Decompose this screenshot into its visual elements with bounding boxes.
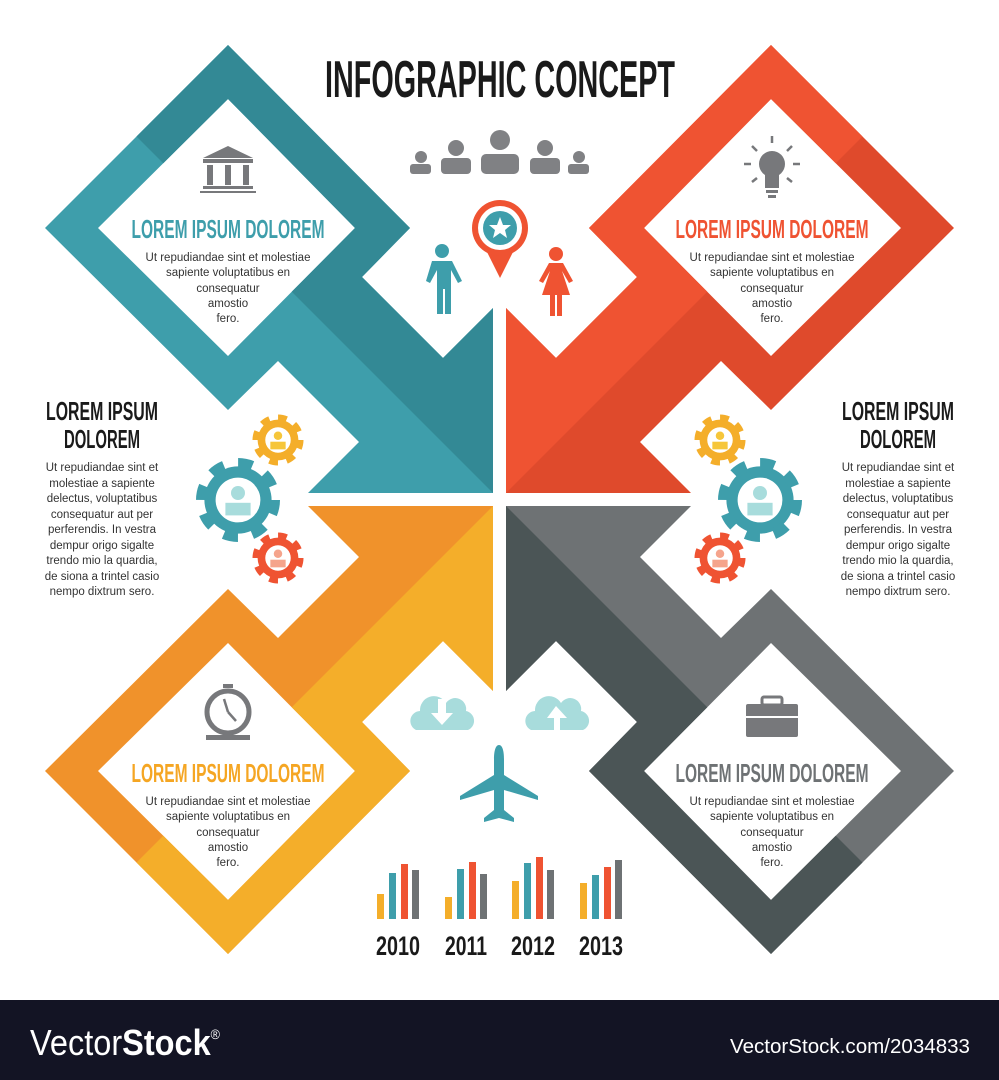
text: teal diamond: fero. xyxy=(216,313,240,325)
text: teal diamond: sapiente voluptatibus en xyxy=(166,267,290,279)
icon: bank xyxy=(200,146,256,193)
text: red diamond: sapiente voluptatibus en xyxy=(710,267,834,279)
text: gray diamond: Ut repudiandae sint et molestiae xyxy=(690,796,854,808)
text: years: 2013 xyxy=(579,931,623,961)
text: left side block: trendo mio la quardia, xyxy=(46,555,158,567)
text: teal diamond: amostio xyxy=(208,298,248,310)
text: red diamond: fero. xyxy=(760,313,784,325)
text: teal diamond: consequatur xyxy=(196,283,260,295)
text: left side block: dempur origo sigalte xyxy=(50,540,154,552)
text: left side block: nempo dixtrum sero. xyxy=(50,586,154,598)
text: right side block: delectus, voluptatibus xyxy=(843,493,954,505)
text: orange diamond: LOREM IPSUM DOLOREM xyxy=(132,758,324,788)
text: left side block: LOREM IPSUM xyxy=(46,396,158,426)
footer bar: VectorStock xyxy=(30,1022,220,1063)
footer bar: VectorStock.com/2034833 xyxy=(730,1036,970,1058)
text: left side block: perferendis. In vestra xyxy=(48,524,157,536)
icon: cloud upload xyxy=(525,696,589,731)
text: right side block: DOLOREM xyxy=(860,424,936,454)
panel: orange arrow xyxy=(45,506,493,954)
text: left side block: de siona a trintel casio xyxy=(45,571,159,583)
title: INFOGRAPHIC CONCEPT xyxy=(325,51,675,109)
text: right side block: dempur origo sigalte xyxy=(846,540,950,552)
icon: location pin with star xyxy=(472,200,528,278)
text: left side block xyxy=(45,396,159,598)
footer bar xyxy=(0,1000,999,1080)
text: left side block: Ut repudiandae sint et xyxy=(46,462,159,474)
text: teal diamond xyxy=(132,214,324,325)
panel: gray arrow xyxy=(506,506,954,954)
text: left side block: DOLOREM xyxy=(64,424,140,454)
footer bar: ® xyxy=(211,1026,221,1042)
text: right side block: Ut repudiandae sint et xyxy=(842,462,955,474)
text: gray diamond: sapiente voluptatibus en xyxy=(710,811,834,823)
icon: right gears xyxy=(698,418,796,580)
text: right side block: trendo mio la quardia, xyxy=(842,555,954,567)
text: orange diamond: fero. xyxy=(216,857,240,869)
text: red diamond: amostio xyxy=(752,298,792,310)
panel: teal arrow xyxy=(45,45,493,493)
text: years: 2011 xyxy=(445,931,487,961)
icon: cloud download xyxy=(410,696,474,730)
text: teal diamond: Ut repudiandae sint et molestiae xyxy=(146,252,310,264)
text: gray diamond: amostio xyxy=(752,842,792,854)
text: left side block: molestiae a sapiente xyxy=(49,478,155,490)
text: right side block: consequatur aut per xyxy=(847,509,949,521)
icon: clock xyxy=(206,684,250,740)
text: right side block xyxy=(841,396,955,598)
text: right side block: molestiae a sapiente xyxy=(845,478,951,490)
text: gray diamond: fero. xyxy=(760,857,784,869)
icon: light bulb xyxy=(744,136,800,198)
text: red diamond: consequatur xyxy=(740,283,804,295)
text: orange diamond: consequatur xyxy=(196,827,260,839)
text: right side block: de siona a trintel casio xyxy=(841,571,955,583)
icon: left gears xyxy=(202,418,300,580)
icon: woman xyxy=(539,247,573,316)
text: years: 2010 xyxy=(376,931,420,961)
text: left side block: delectus, voluptatibus xyxy=(47,493,158,505)
text: gray diamond xyxy=(676,758,868,869)
text: red diamond xyxy=(676,214,868,325)
icon: airplane xyxy=(460,745,538,822)
text: red diamond: LOREM IPSUM DOLOREM xyxy=(676,214,868,244)
text: teal diamond: LOREM IPSUM DOLOREM xyxy=(132,214,324,244)
text: right side block: perferendis. In vestra xyxy=(844,524,953,536)
icon: man xyxy=(426,244,462,314)
text: orange diamond: sapiente voluptatibus en xyxy=(166,811,290,823)
text: right side block: nempo dixtrum sero. xyxy=(846,586,950,598)
text: years xyxy=(376,931,623,961)
bar chart xyxy=(377,857,622,919)
text: gray diamond: consequatur xyxy=(740,827,804,839)
text: gray diamond: LOREM IPSUM DOLOREM xyxy=(676,758,868,788)
icon: briefcase xyxy=(746,697,798,737)
text: years: 2012 xyxy=(511,931,555,961)
panel: red arrow xyxy=(506,45,954,493)
text: orange diamond: Ut repudiandae sint et molestiae xyxy=(146,796,310,808)
icon: people row xyxy=(410,130,589,174)
text: red diamond: Ut repudiandae sint et molestiae xyxy=(690,252,854,264)
text: left side block: consequatur aut per xyxy=(51,509,153,521)
text: orange diamond: amostio xyxy=(208,842,248,854)
text: orange diamond xyxy=(132,758,324,869)
